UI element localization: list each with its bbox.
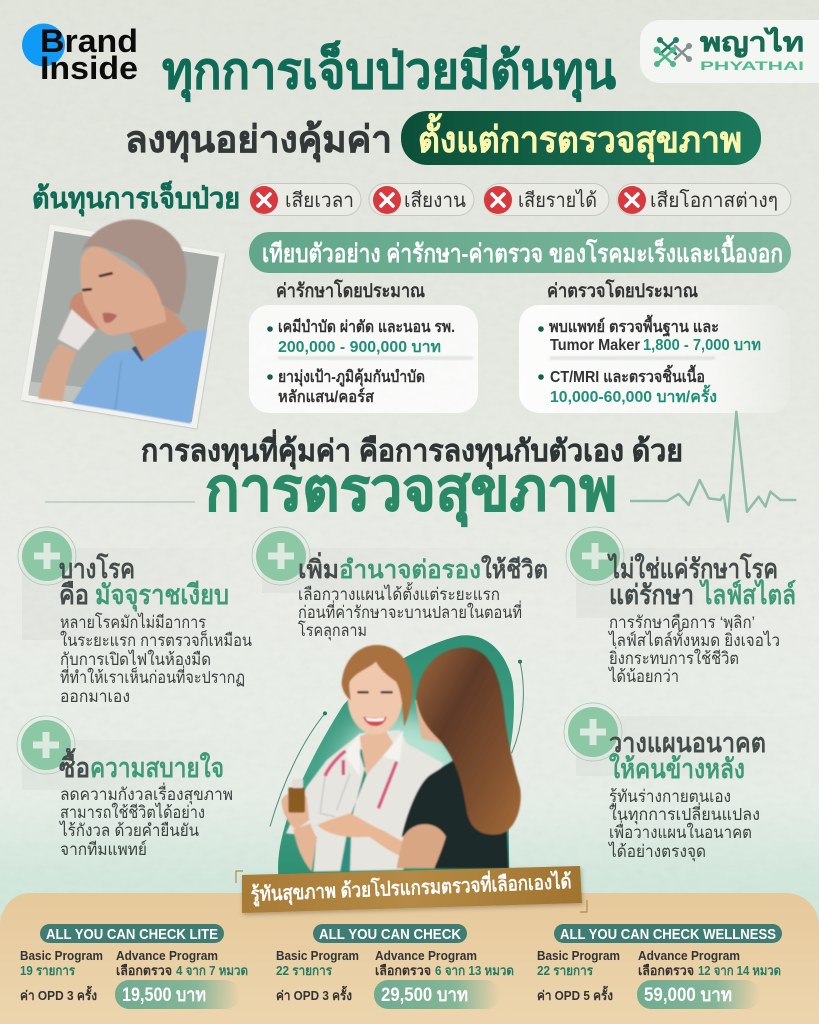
scrubs xyxy=(72,330,207,424)
program: Check: ALL YOU CAN CHECK xyxy=(319,926,461,943)
doctor coat xyxy=(286,730,443,872)
program: Check: 29,500 บาท xyxy=(381,985,468,1006)
benefit: bargaining power: โรคลุกลาม xyxy=(298,620,367,641)
panel: treatment cost: ยามุ่งเป้า-ภูมิคุ้มกันบำบัด xyxy=(278,368,425,388)
benefit: silent killer: ออกมาเอง xyxy=(60,687,130,706)
benefit: future planning: ได้อย่างตรงจุด xyxy=(607,841,706,862)
panel: checkup cost: พบแพทย์ ตรวจพื้นฐาน และ xyxy=(549,314,719,337)
holding hand and arm xyxy=(293,823,317,872)
program: Lite: 4 จาก 7 หมวด xyxy=(176,963,248,978)
patient arm xyxy=(397,824,446,868)
panel: checkup cost: Tumor Maker xyxy=(550,337,640,354)
neck xyxy=(128,305,188,360)
heading: treatment cost: ค่ารักษาโดยประมาณ xyxy=(276,279,425,302)
heading: worthwhile investment: การลงทุนที่คุ้มค่า คือการลงทุนกับตัวเอง ด้วย xyxy=(141,429,683,470)
benefit: future planning: เพื่อวางแผนในอนาคต xyxy=(609,820,752,842)
program: Lite: เลือกตรวจ xyxy=(116,963,172,978)
bottle xyxy=(288,787,305,813)
benefit: silent killer: มัจจุราชเงียบ xyxy=(95,580,229,612)
benefit: peace of mind: ซื้อ xyxy=(59,747,90,783)
panel: checkup cost: 1,800 - 7,000 บาท xyxy=(643,337,761,354)
program: Check xyxy=(276,924,514,1009)
benefit: future planning: วางแผนอนาคต xyxy=(609,728,766,758)
pill: lost opportunities xyxy=(617,184,791,216)
benefit: silent killer xyxy=(18,527,267,706)
cost pills xyxy=(250,184,791,216)
benefit: peace of mind: ความสบายใจ xyxy=(90,752,224,783)
panel: checkup cost: 10,000-60,000 บาท/ครั้ง xyxy=(550,384,717,406)
benefit: bargaining power xyxy=(252,527,548,641)
photo: doctor and patient xyxy=(270,635,523,876)
benefit: bargaining power: ให้ชีวิต xyxy=(481,554,548,584)
program: Wellness: 59,000 บาท xyxy=(644,985,732,1006)
benefit: lifestyle: ยิ่งกระทบการใช้ชีวิต xyxy=(609,646,739,668)
benefit: silent killer: กับการเปิดไฟในห้องมืด xyxy=(60,649,211,669)
panel: treatment cost: หลักแสน/คอร์ส xyxy=(278,387,374,406)
neck xyxy=(359,727,393,775)
benefit: peace of mind: จากทีมแพทย์ xyxy=(60,840,147,859)
logo: Brand Inside: Brand xyxy=(40,23,138,59)
open palm and forearm xyxy=(317,813,406,857)
benefit: bargaining power: อำนาจต่อรอง xyxy=(339,556,481,584)
pill: lost work: เสียงาน xyxy=(404,190,466,212)
benefit: lifestyle: การรักษาคือการ ‘พลิก’ xyxy=(609,613,755,632)
eyes and lips xyxy=(83,273,112,290)
program: Wellness: 12 จาก 14 หมวด xyxy=(698,963,781,978)
stethoscope xyxy=(325,751,397,808)
program: Wellness xyxy=(537,924,782,1009)
panel: treatment cost xyxy=(249,279,478,413)
face xyxy=(80,246,166,335)
benefit: silent killer: หลายโรคมักไม่มีอาการ xyxy=(60,612,206,632)
patient face xyxy=(415,700,450,745)
program: Lite: 19,500 บาท xyxy=(122,985,206,1006)
program: Wellness: ค่า OPD 5 ครั้ง xyxy=(537,985,613,1003)
program: Check: 6 จาก 13 หมวด xyxy=(435,963,514,978)
icon: plus xyxy=(564,703,622,761)
program: Lite: Basic Program xyxy=(20,948,103,963)
logo: Brand Inside xyxy=(22,23,138,86)
program: Lite: ค่า OPD 3 ครั้ง xyxy=(20,985,97,1003)
icon: plus xyxy=(566,527,624,585)
logo: Phyathai: PHYATHAI xyxy=(700,59,804,73)
program: Check: ค่า OPD 3 ครั้ง xyxy=(276,985,352,1003)
pill: lost income: เสียรายได้ xyxy=(518,189,597,212)
program: Lite: 19 รายการ xyxy=(20,963,75,978)
heading: cost of illness: ต้นทุนการเจ็บป่วย xyxy=(32,180,240,216)
smile xyxy=(363,717,387,726)
icon: plus xyxy=(17,716,75,774)
pill: lost time: เสียเวลา xyxy=(285,190,354,212)
benefit: silent killer: ที่ทำให้เราเห็นก่อนที่จะปรากฏ xyxy=(60,665,245,687)
photo: patient xyxy=(21,219,225,428)
benefit: bargaining power: เลือกวางแผนได้ตั้งแต่ระยะแรก xyxy=(298,582,500,604)
tag: choose your own program xyxy=(236,866,587,913)
benefit: bargaining power: เพิ่ม xyxy=(298,552,339,584)
hand xyxy=(70,292,103,332)
turban xyxy=(81,219,186,315)
program: Wellness: เลือกตรวจ xyxy=(638,963,694,978)
logo: Phyathai xyxy=(640,20,819,83)
heartbeat line xyxy=(45,412,796,522)
program: Wellness: Basic Program xyxy=(537,948,620,963)
benefit: lifestyle: ไลฟ์สไตล์ xyxy=(698,579,796,610)
icon: plus xyxy=(252,527,310,585)
head xyxy=(348,662,402,734)
program: Check: 22 รายการ xyxy=(276,963,332,978)
program: Lite: Advance Program xyxy=(116,948,218,963)
pill: lost opportunities: เสียโอกาสต่างๆ xyxy=(650,189,778,212)
benefit: future planning: ให้คนข้างหลัง xyxy=(609,753,745,784)
program: Lite: ALL YOU CAN CHECK LITE xyxy=(46,926,218,943)
benefit: lifestyle: ได้น้อยกว่า xyxy=(607,666,679,686)
benefit: future planning: รู้ทันร่างกายตนเอง xyxy=(609,787,731,807)
teal blob xyxy=(278,635,514,876)
hair xyxy=(342,645,413,727)
title: ทุกการเจ็บป่วยมีต้นทุน xyxy=(162,40,616,102)
subtitle text: ลงทุนอย่างคุ้มค่า xyxy=(125,119,392,163)
patient hair xyxy=(416,647,521,835)
pill: lost income xyxy=(484,184,609,216)
benefit: silent killer: บางโรค xyxy=(59,552,135,584)
heading: health check: การตรวจสุขภาพ xyxy=(205,456,617,527)
eyes xyxy=(358,689,392,696)
tag: choose your own program: รู้ทันสุขภาพ ด้วยโปรแกรมตรวจที่เลือกเองได้ xyxy=(250,866,572,908)
panel: checkup cost: CT/MRI และตรวจชิ้นเนื้อ xyxy=(550,364,705,386)
program: Wellness: 22 รายการ xyxy=(537,963,593,978)
scrubs xyxy=(340,747,368,872)
benefit: silent killer: ในระยะแรก การตรวจก็เหมือน xyxy=(60,629,252,650)
panel: programs xyxy=(0,866,819,1024)
banner: compare costs xyxy=(249,232,791,273)
benefit: future planning: ในทุกการเปลี่ยนแปลง xyxy=(609,802,760,825)
benefit: silent killer: คือ xyxy=(59,580,89,610)
program: Lite xyxy=(20,924,248,1009)
benefit: lifestyle: แต่รักษา xyxy=(609,580,694,610)
benefit: peace of mind: ไร้กังวล ด้วยคำยืนยัน xyxy=(58,820,199,840)
panel: checkup cost xyxy=(519,279,790,413)
panel: treatment cost: เคมีบำบัด ผ่าตัด และนอน รพ. xyxy=(278,317,455,336)
benefit: future planning xyxy=(564,703,801,862)
program: Check: Advance Program xyxy=(375,948,477,963)
bandage xyxy=(58,309,96,350)
logo: Phyathai: พญาไท xyxy=(700,26,804,58)
arm xyxy=(38,343,77,402)
benefit: bargaining power: ก่อนที่ค่ารักษาจะบานปลายในตอนที่ xyxy=(298,600,522,622)
patient shirt xyxy=(402,758,508,868)
panel: treatment cost: 200,000 - 900,000 บาท xyxy=(278,339,441,356)
program: Check: Basic Program xyxy=(276,948,359,963)
pill: lost time xyxy=(250,184,361,216)
pill: lost work xyxy=(369,184,474,216)
benefit: lifestyle xyxy=(566,527,801,686)
collar xyxy=(343,730,403,777)
benefit: peace of mind xyxy=(17,716,247,859)
program: Wellness: Advance Program xyxy=(638,948,740,963)
heading: checkup cost: ค่าตรวจโดยประมาณ xyxy=(547,279,698,302)
logo: Brand Inside: Inside xyxy=(40,50,138,86)
benefit: peace of mind: ลดความกังวลเรื่องสุขภาพ xyxy=(60,782,233,805)
program: Wellness: ALL YOU CAN CHECK WELLNESS xyxy=(560,926,776,943)
subtitle pill: ตั้งแต่การตรวจสุขภาพ xyxy=(418,113,742,163)
benefit: peace of mind: สามารถใช้ชีวิตได้อย่าง xyxy=(60,802,205,822)
icon: plus xyxy=(18,527,76,585)
benefit: lifestyle: ไม่ใช่แค่รักษาโรค xyxy=(607,552,778,584)
benefit: lifestyle: ไลฟ์สไตล์ทั้งหมด ยิ่งเจอไว xyxy=(607,628,780,650)
program: Check: เลือกตรวจ xyxy=(375,963,431,978)
